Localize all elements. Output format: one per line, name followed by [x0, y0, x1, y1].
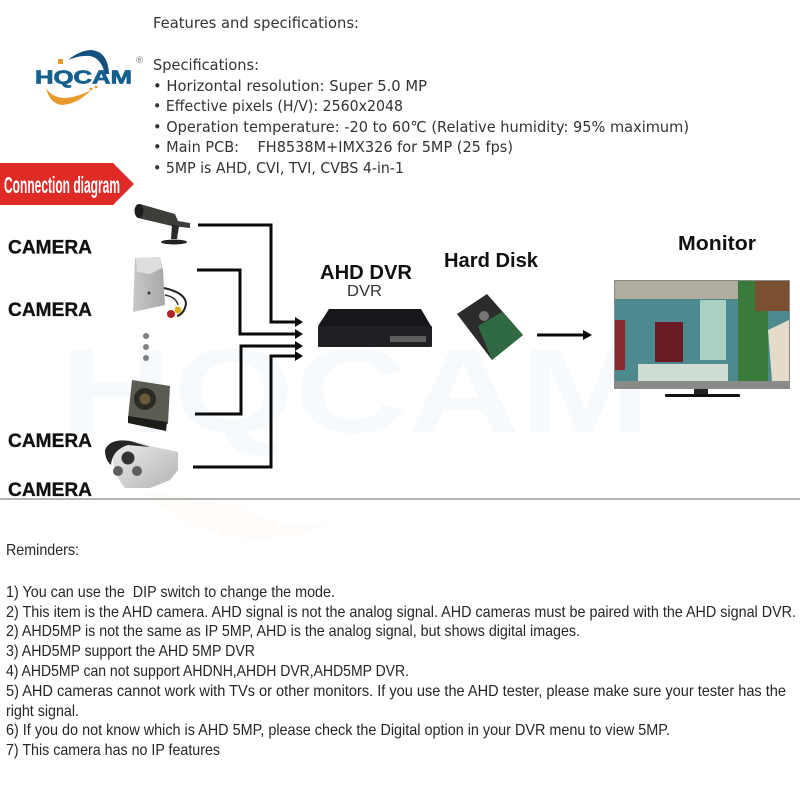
icon: monitor with store scene — [614, 280, 790, 397]
camera labels — [8, 236, 92, 501]
text block: reminders list — [6, 584, 796, 759]
text block: specifications — [153, 56, 689, 177]
divider — [0, 498, 800, 500]
icon: dots — [143, 333, 149, 361]
label: hard disk: Hard Disk — [444, 250, 539, 272]
connection lines — [193, 225, 303, 467]
label: AHD DVR: AHD DVR — [320, 262, 413, 284]
heading: reminders: Reminders: — [6, 542, 79, 559]
text block: specifications: • Effective pixels (H/V): 2560x2048 — [153, 97, 403, 115]
text block: reminders list: 7) This camera has no IP features — [6, 742, 220, 759]
label: AHD DVR: DVR — [347, 283, 382, 300]
arrow: hard disk to monitor — [537, 330, 592, 340]
banner: connection diagram — [0, 163, 134, 205]
text block: reminders list: 3) AHD5MP support the AHD 5MP DVR — [6, 643, 255, 660]
heading: features and specifications: Features and specifications: — [153, 14, 359, 32]
logo: HQCAM: ® — [135, 56, 144, 66]
text block: specifications: • Main PCB: FH8538M+IMX326 for 5MP (25 fps) — [153, 138, 513, 156]
banner: connection diagram: Connection diagram — [4, 172, 120, 198]
text block: specifications: • Operation temperature: -20 to 60℃ (Relative humidity: 95% maximum) — [153, 118, 689, 136]
text block: specifications: • 5MP is AHD, CVI, TVI, CVBS 4-in-1 — [153, 159, 404, 177]
text block: reminders list: right signal. — [6, 703, 79, 720]
camera labels: CAMERA — [8, 236, 92, 258]
icon: hard disk — [457, 294, 523, 360]
logo: HQCAM: HQCAM — [35, 66, 132, 88]
icon: bullet camera — [134, 204, 190, 244]
watermark: faint logo behind diagram — [60, 324, 650, 539]
logo: HQCAM — [35, 50, 144, 105]
icon: PIR camera — [133, 257, 186, 318]
label: AHD DVR — [320, 262, 413, 300]
icon: board camera — [128, 380, 170, 431]
icon: bullet security camera — [105, 440, 178, 488]
watermark: faint logo behind diagram: HQCAM — [60, 324, 650, 458]
icon: DVR — [318, 309, 432, 347]
camera labels: CAMERA — [8, 299, 92, 321]
text block: reminders list: 1) You can use the DIP switch to change the mode. — [6, 584, 335, 601]
camera labels: CAMERA — [8, 479, 92, 501]
label: monitor: Monitor — [678, 233, 756, 255]
camera labels: CAMERA — [8, 430, 92, 452]
text block: reminders list: 2) AHD5MP is not the same as IP 5MP, AHD is the analog signal, but shows digital images. — [6, 623, 580, 640]
text block: specifications: Specifications: — [153, 56, 259, 74]
text block: reminders list: 6) If you do not know which is AHD 5MP, please check the Digital option in your DVR menu to view 5MP. — [6, 722, 670, 739]
text block: specifications: • Horizontal resolution: Super 5.0 MP — [153, 77, 427, 95]
text block: reminders list: 4) AHD5MP can not support AHDNH,AHDH DVR,AHD5MP DVR. — [6, 663, 409, 680]
